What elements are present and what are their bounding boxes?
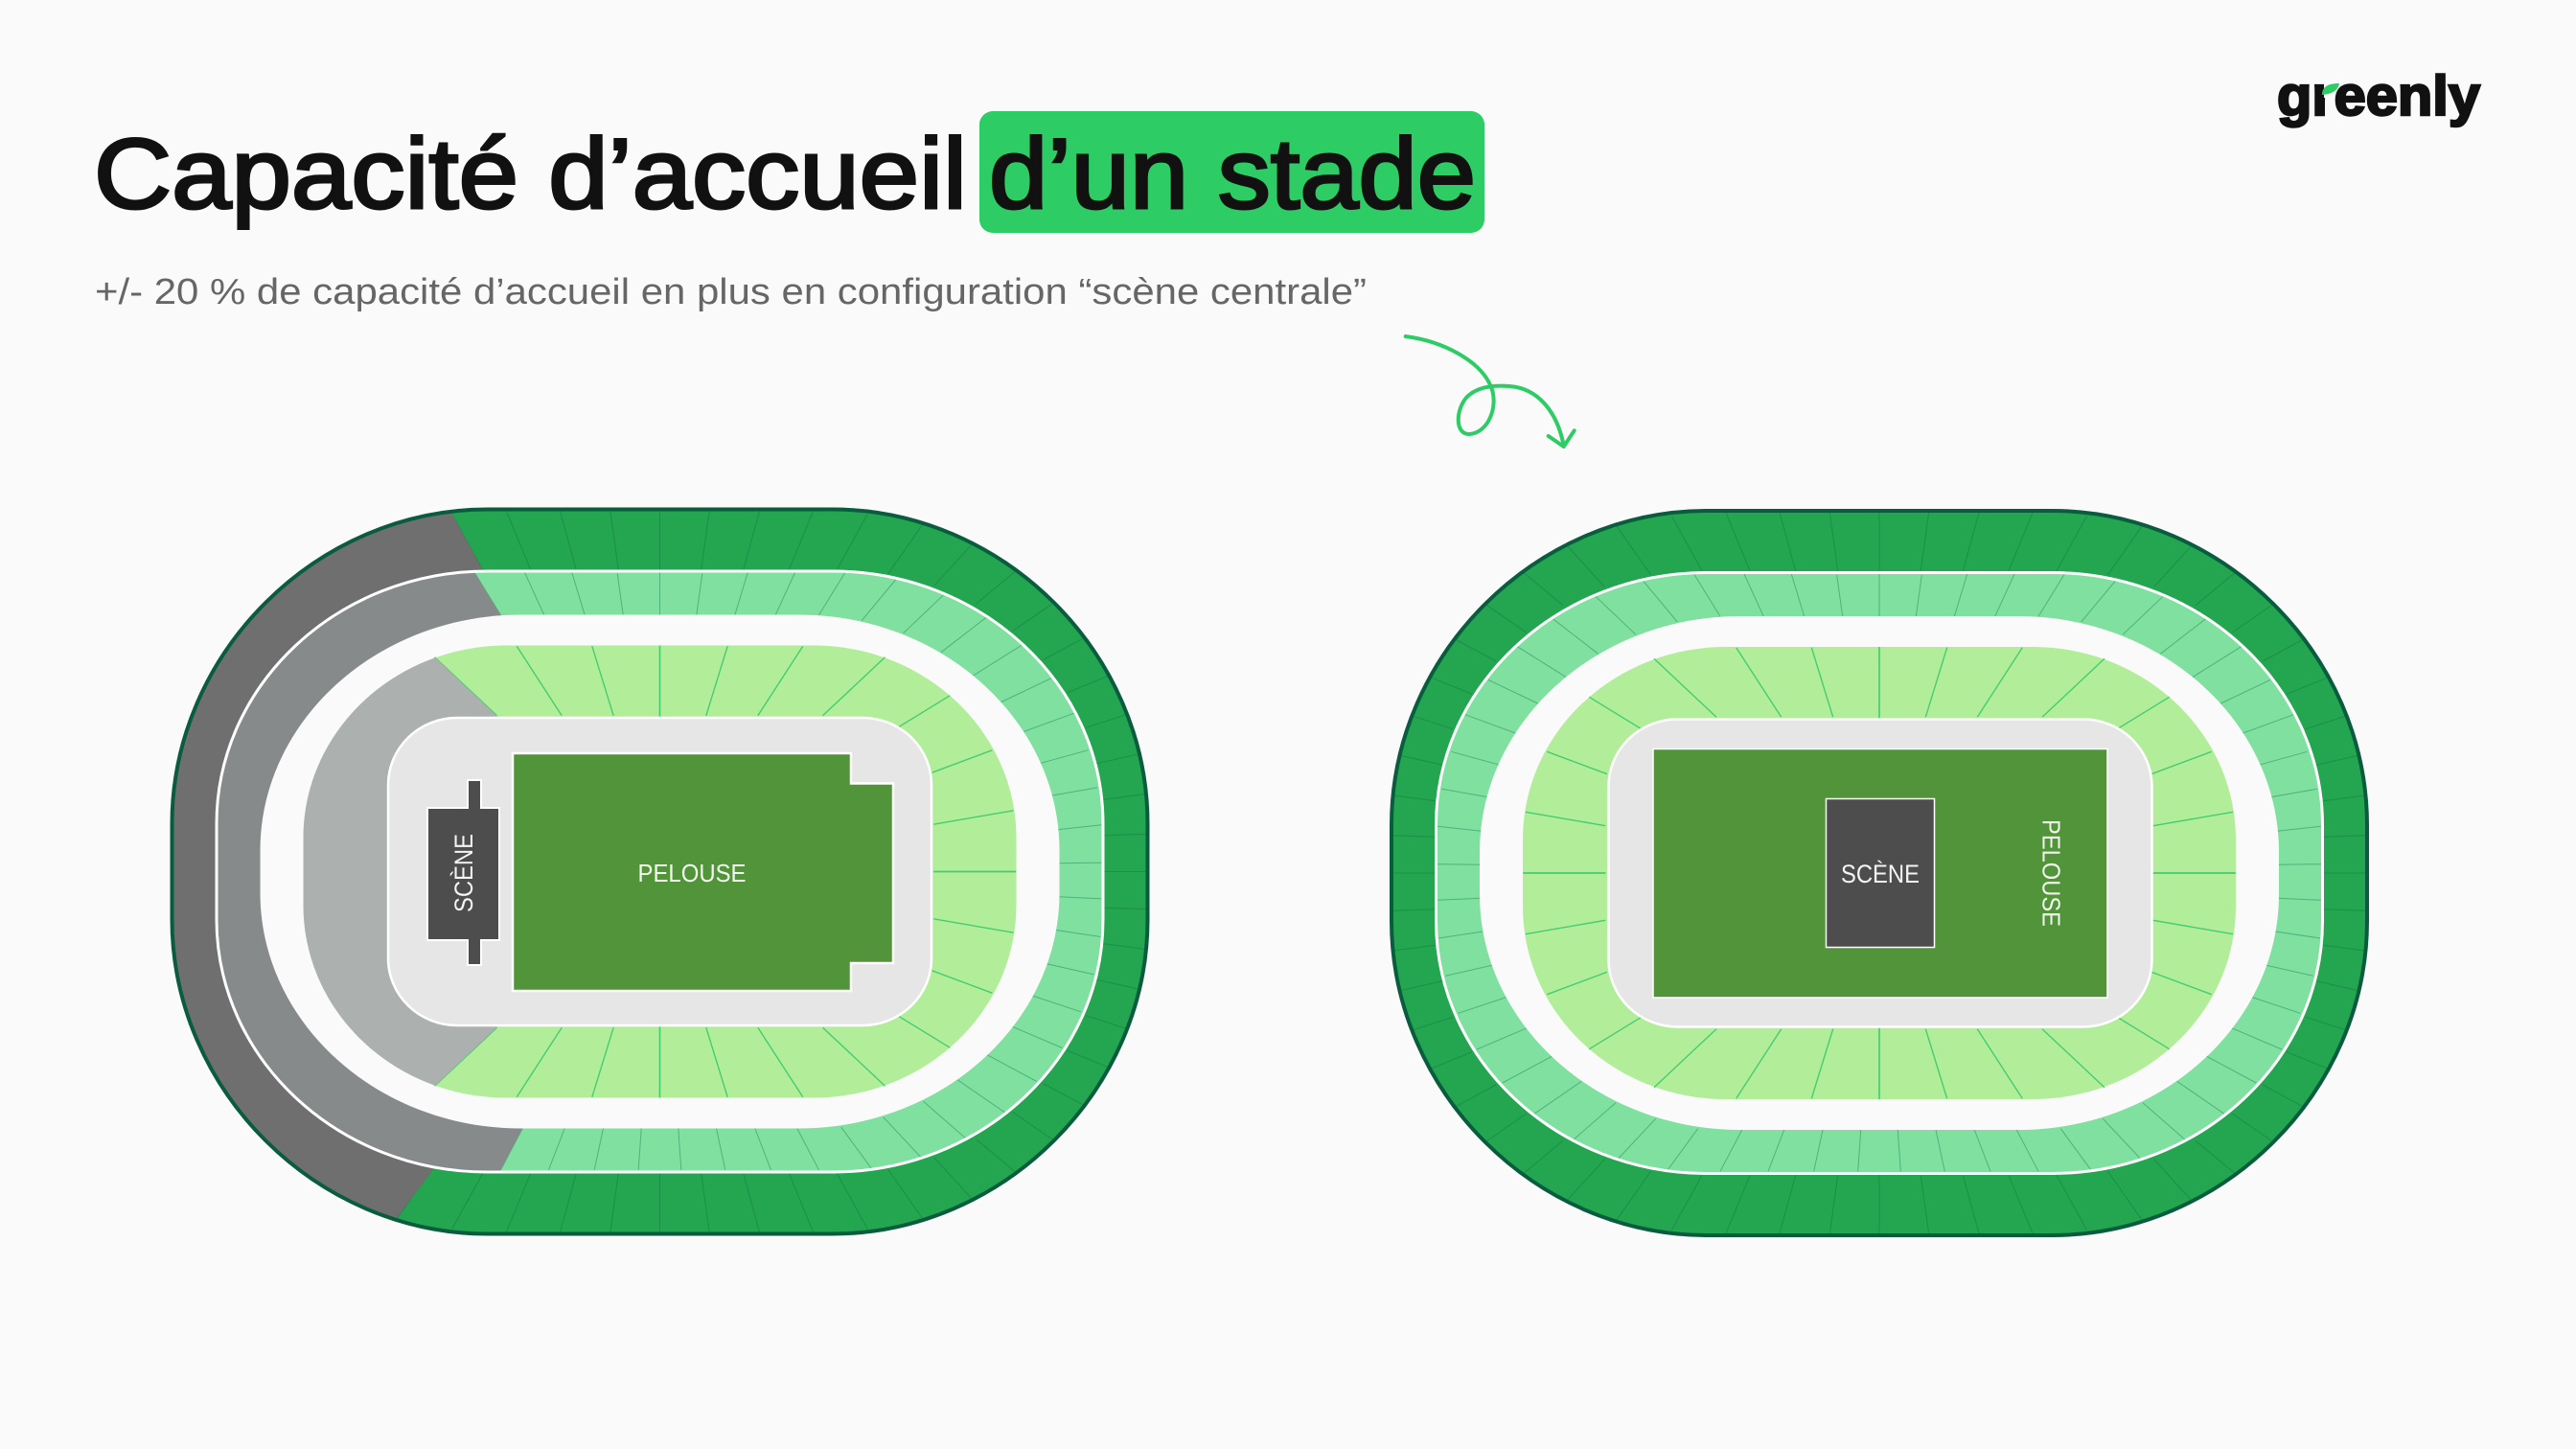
middle tier ring — [1392, 511, 2367, 1235]
logo ear cover — [2324, 79, 2334, 98]
subtitle: +/- 20 % de capacité d’accueil en plus en configuration “scène centrale” — [95, 272, 1367, 312]
title — [94, 111, 1484, 233]
stage — [1827, 799, 1934, 947]
lower tier ring — [303, 646, 1016, 1098]
lower tier ring — [1523, 647, 2236, 1099]
pitch — [1653, 749, 2107, 998]
pitch label: PELOUSE — [638, 859, 746, 887]
panel: stadium with end stage (left) — [172, 510, 1148, 1234]
title text: Capacité d’accueil — [94, 119, 967, 230]
logo: greenly: greenly — [2277, 65, 2480, 127]
arrow: curly arrow from left stadium to right stadium — [1406, 336, 1575, 447]
upper tier ring — [1392, 511, 2367, 1235]
stage label: SCÈNE — [449, 834, 478, 912]
title highlighted text: d’un stade — [989, 119, 1476, 230]
upper tier ring — [172, 510, 1148, 1234]
pitch label: PELOUSE — [2037, 819, 2066, 927]
middle tier ring — [172, 510, 1148, 1234]
infield — [1608, 719, 2152, 1027]
pitch — [513, 753, 893, 991]
infield — [388, 718, 932, 1025]
title highlight box — [979, 111, 1484, 233]
logo leaf — [2322, 83, 2339, 95]
stage — [427, 780, 499, 965]
stage label: SCÈNE — [1841, 860, 1920, 888]
panel: stadium with central stage (right) — [1392, 511, 2367, 1235]
